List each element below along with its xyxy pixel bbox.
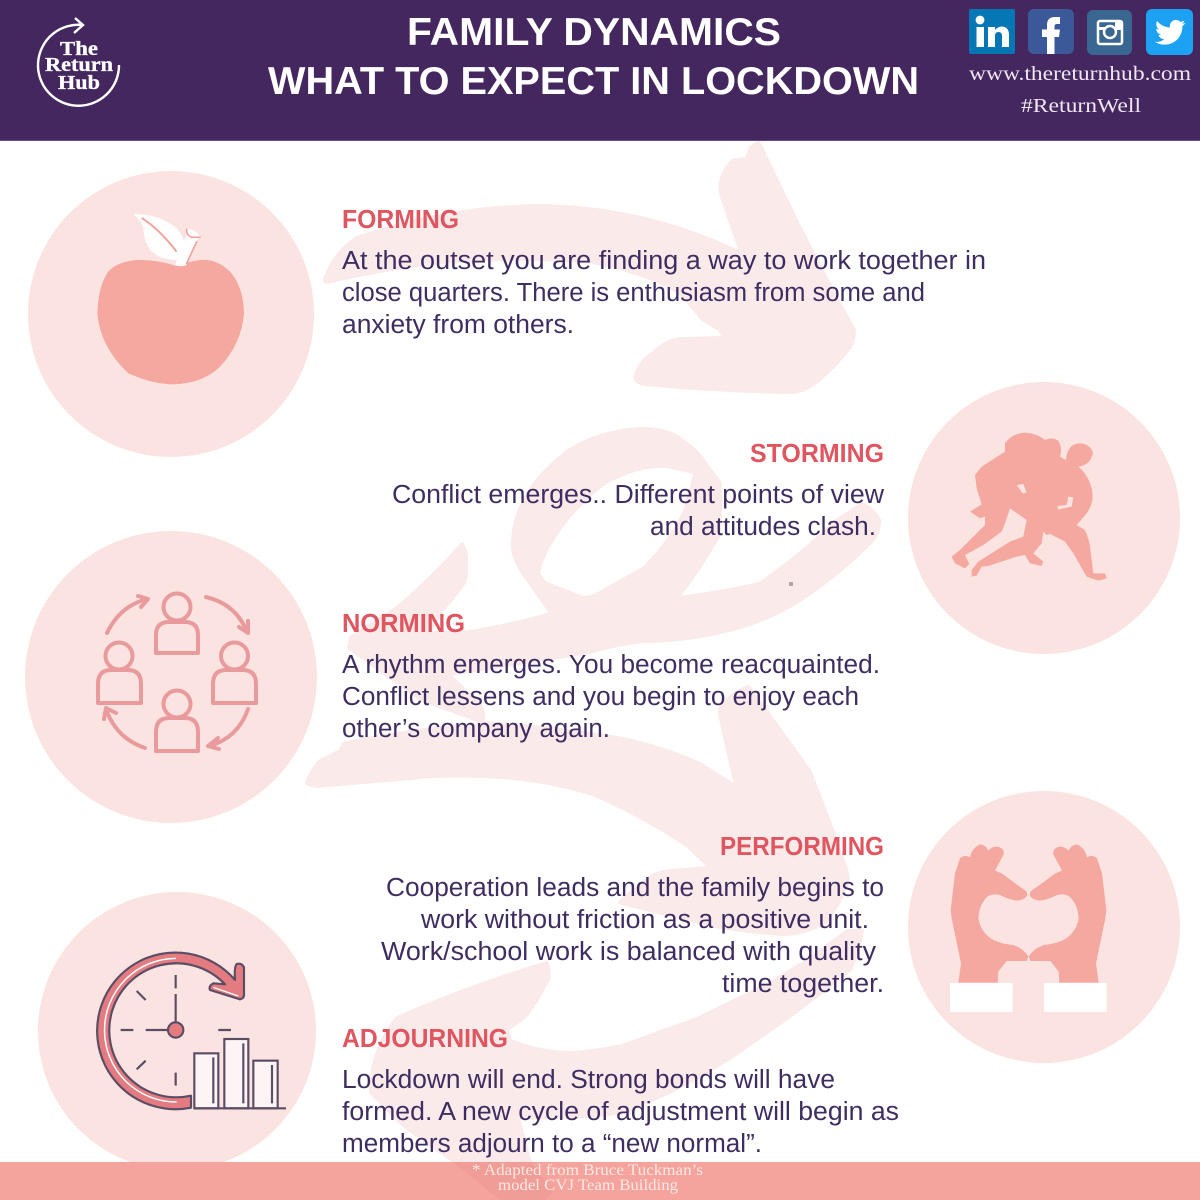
- text block: forming: anxiety from others.: [342, 311, 574, 339]
- icon: twitter: [1146, 9, 1193, 55]
- panel: adjourning icon: [38, 892, 316, 1170]
- text block: norming: [342, 651, 880, 743]
- panel: storming icon: [908, 382, 1180, 654]
- website and hashtag: #ReturnWell: [1021, 95, 1142, 117]
- panel: performing icon: [908, 791, 1180, 1063]
- icon: instagram: [1087, 10, 1132, 55]
- text block: performing: [381, 874, 884, 998]
- logo: The Return Hub: The: [60, 38, 98, 60]
- icon: linkedin: [969, 9, 1015, 54]
- background swirl arrows: [306, 141, 880, 1200]
- icon: facebook: [1028, 9, 1074, 54]
- heading: performing: PERFORMING: [720, 833, 884, 861]
- text block: performing: Cooperation leads and the family begins to: [386, 874, 884, 902]
- logo: The Return Hub: Return: [45, 54, 113, 76]
- text block: norming: other’s company again.: [342, 715, 610, 743]
- title: FAMILY DYNAMICS: [407, 11, 781, 54]
- text block: storming: Conflict emerges.. Different points of view: [392, 481, 885, 509]
- text block: performing: time together.: [722, 970, 884, 998]
- text block: norming: A rhythm emerges. You become reacquainted.: [342, 651, 880, 679]
- text block: norming: Conflict lessens and you begin to enjoy each: [342, 683, 859, 711]
- text block: performing: Work/school work is balanced with quality: [381, 938, 876, 966]
- text block: forming: At the outset you are finding a way to work together in: [342, 247, 986, 275]
- text block: adjourning: formed. A new cycle of adjustment will begin as: [342, 1098, 899, 1126]
- website and hashtag: [969, 63, 1192, 117]
- text block: performing: work without friction as a positive unit.: [420, 906, 869, 934]
- footer attribution: * Adapted from Bruce Tuckman’s: [472, 1162, 703, 1179]
- header banner: [0, 0, 1200, 141]
- text block: forming: [342, 247, 986, 339]
- text block: storming: and attitudes clash.: [650, 513, 876, 541]
- text block: adjourning: members adjourn to a “new normal”.: [342, 1130, 762, 1158]
- heading: storming: STORMING: [750, 440, 884, 468]
- website and hashtag: www.thereturnhub.com: [969, 63, 1192, 85]
- panel: forming icon: [28, 171, 314, 457]
- text block: adjourning: Lockdown will end. Strong bonds will have: [342, 1066, 835, 1094]
- heading: adjourning: ADJOURNING: [342, 1025, 508, 1053]
- title: WHAT TO EXPECT IN LOCKDOWN: [268, 60, 919, 103]
- footer attribution: [472, 1162, 703, 1194]
- footer band: [0, 1162, 1200, 1200]
- text block: storming: [392, 481, 885, 541]
- logo: The Return Hub: [38, 18, 119, 106]
- heading: forming: FORMING: [342, 206, 459, 234]
- text block: forming: close quarters. There is enthusiasm from some and: [342, 279, 925, 307]
- text block: adjourning: [342, 1066, 899, 1158]
- heading: norming: NORMING: [342, 610, 465, 638]
- footer attribution: model CVJ Team Building: [498, 1177, 678, 1194]
- logo: The Return Hub: Hub: [58, 72, 100, 94]
- panel: norming icon: [25, 531, 317, 823]
- title: [268, 11, 919, 103]
